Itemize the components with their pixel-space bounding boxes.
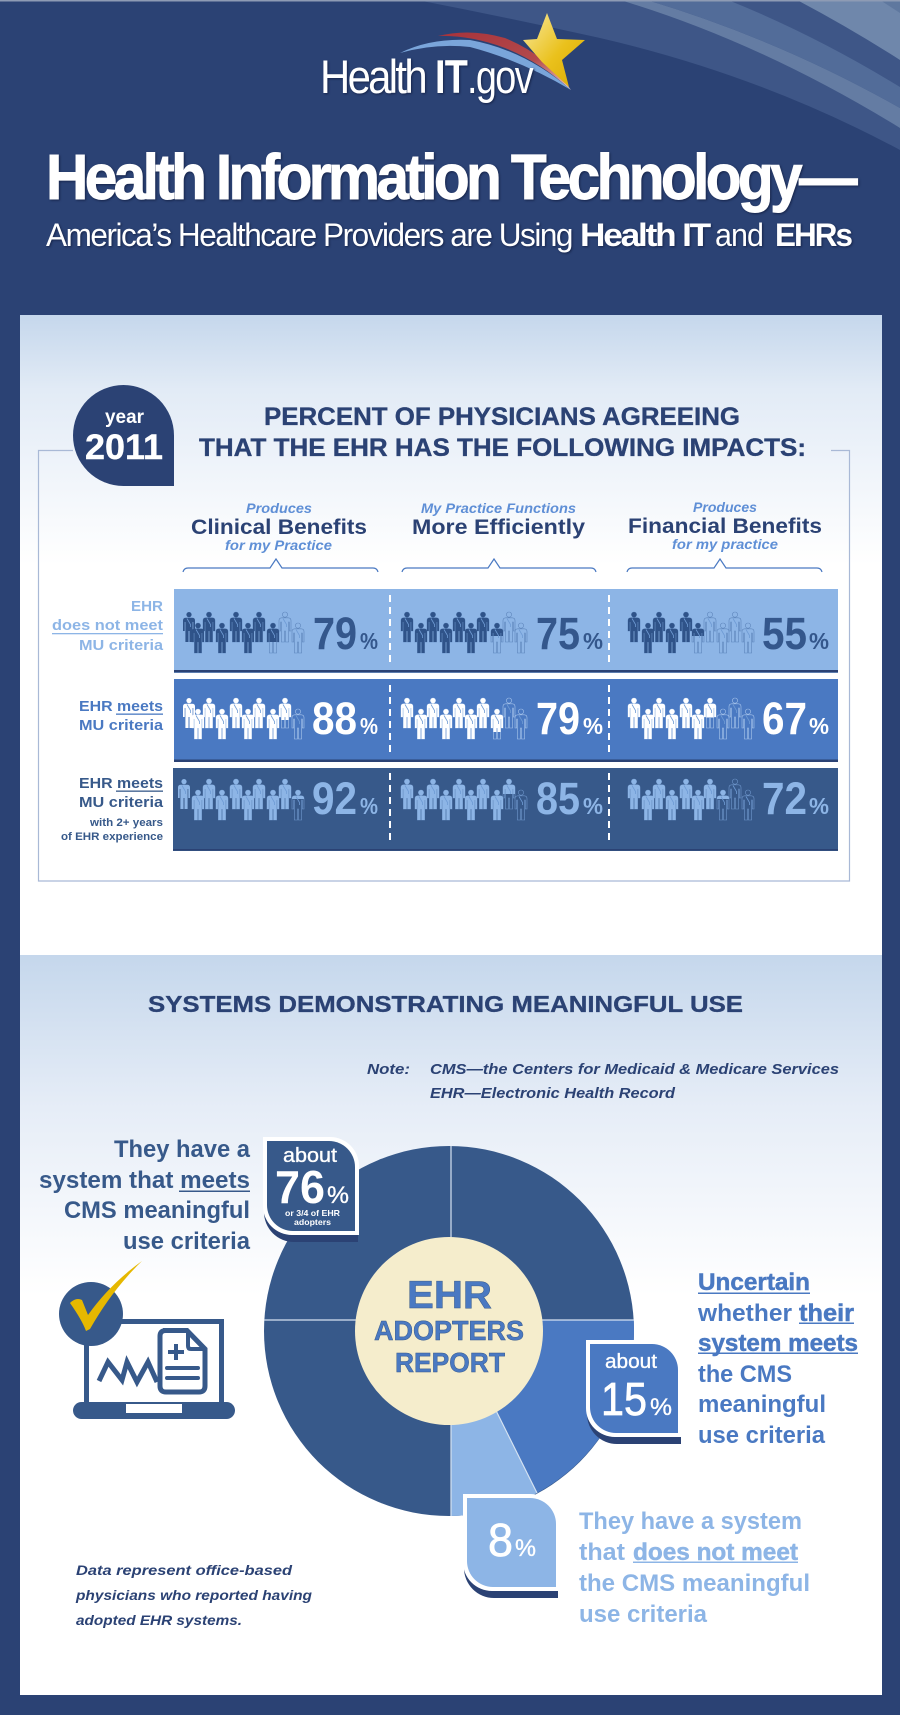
value 75%: 75 [536,608,580,659]
value 79%: 79 [313,608,357,659]
callout: 8% [463,1494,559,1598]
row label: meets: MU criteria [79,717,164,734]
center circle label [355,1237,543,1425]
people: 79 percent [183,612,304,653]
callout: about 76%: % [327,1182,349,1209]
footnote: adopted EHR systems. [76,1612,242,1628]
heading: percent of physicians: PERCENT OF PHYSICIANS AGREEING [264,403,740,431]
callout: about 76%: or 3/4 of EHR [285,1208,340,1218]
row 1: EHR does not meet MU criteria [174,589,838,673]
heading: percent of physicians [199,403,806,462]
value 79%: 79 [536,693,580,744]
value 92%: % [360,793,378,819]
icon: laptop with record and check mark [59,1261,235,1419]
heading: percent of physicians: THAT THE EHR HAS THE FOLLOWING IMPACTS: [199,434,806,462]
panel: white content background [20,315,882,1695]
row label: meets with 2+ years: with 2+ years [89,817,163,829]
people: 67 percent [628,698,754,739]
text: meets criteria [39,1136,251,1255]
text: uncertain: use criteria [698,1422,826,1449]
people: 92 percent [178,779,304,820]
value 92%: 92 [312,773,357,824]
value 79%: % [360,628,378,654]
row label: does not meet: MU criteria [79,637,164,654]
people: 55 percent [628,612,754,653]
footnote [75,1562,312,1628]
value 75%: % [583,628,603,654]
logo: HealthIT.gov [320,13,585,103]
heading: systems demonstrating meaningful use: SYSTEMS DEMONSTRATING MEANINGFUL USE [148,991,743,1017]
text: does not meet [579,1508,810,1628]
footnote: Data represent office-based [76,1562,293,1578]
logo: HealthIT.gov: Health [320,50,426,103]
value 72%: % [809,793,829,819]
text: does not meet: They have a system [579,1508,802,1535]
donut chart [264,1146,634,1516]
people: 85 percent [401,779,527,820]
value 55%: 55 [762,608,807,659]
callout: about 15%: about [605,1351,657,1373]
text: meets criteria: They have a [114,1136,251,1163]
value 67%: 67 [762,693,807,744]
value 55%: % [809,628,829,654]
note: EHR—Electronic Health Record [430,1085,676,1102]
callout: about 15%: % [650,1394,672,1421]
value 88%: 88 [312,693,357,744]
note: Note: [367,1061,410,1078]
column header: more efficiently [402,500,596,572]
column header: financial benefits: Financial Benefits [628,515,822,538]
column header: more efficiently: My Practice Functions [421,500,576,516]
callout: about 76%: adopters [294,1217,331,1227]
panel frame [38,450,850,881]
logo: HealthIT.gov: IT [435,50,468,103]
value 67%: % [809,713,829,739]
row 3: EHR meets MU criteria with 2+ years [173,768,838,851]
text: uncertain: the CMS [698,1361,792,1388]
callout: about 15%: 15 [601,1373,647,1425]
text: does not meet: that [579,1539,625,1566]
column header: more efficiently: More Efficiently [412,516,585,539]
text: meets criteria: system that meets [39,1167,250,1194]
column header: clinical benefits [183,500,378,572]
center circle label: EHR [407,1274,492,1317]
text: does not meet: the CMS meaningful [579,1570,810,1597]
people: 72 percent [628,779,754,820]
text: uncertain: whether [697,1300,792,1327]
year badge: 2011 [85,428,163,467]
center circle label: REPORT [395,1347,505,1378]
subtitle: America’s Healthcare Providers are Using [46,217,572,253]
segment: 8 percent [451,1320,537,1516]
people: 75 percent [401,612,527,653]
value 88%: % [360,713,378,739]
note: CMS—the Centers for Medicaid & Medicare Services [430,1061,839,1078]
segment: 15 percent [451,1320,634,1493]
segment: 76 percent [264,1146,634,1516]
row label: meets with 2+ years: EHR meets [79,775,163,792]
row label: meets [79,698,164,734]
text: uncertain: their [799,1300,854,1327]
year badge [73,385,174,486]
row label: does not meet: EHR [131,598,163,615]
value 85%: 85 [536,773,580,824]
text: does not meet: use criteria [579,1601,708,1628]
subtitle: and [715,217,763,253]
subtitle: Health IT [580,217,712,253]
column header: clinical benefits: Produces [246,500,312,516]
column header: financial benefits: for my practice [672,536,778,552]
note [367,1061,839,1102]
callout: 8%: % [515,1535,536,1562]
text: meets criteria: CMS meaningful [64,1197,250,1224]
center circle label: ADOPTERS [374,1315,524,1346]
callout: about 76% [263,1137,359,1242]
row label: meets: EHR meets [79,698,163,715]
text: meets criteria: use criteria [123,1228,251,1255]
value 85%: % [583,793,603,819]
subtitle: EHRs [775,217,852,253]
value 72%: 72 [762,773,807,824]
people: 88 percent [183,698,304,739]
callout: about 15% [586,1340,681,1444]
callout: 8%: 8 [488,1514,513,1566]
column header: financial benefits [627,499,822,572]
people: 79 percent [401,698,527,739]
row label: does not meet: does not meet [52,617,163,634]
row 2: EHR meets MU criteria [174,679,838,762]
text: does not meet: does not meet [633,1539,798,1566]
row label: meets with 2+ years: MU criteria [79,794,164,811]
callout: about 76%: about [283,1145,337,1167]
text: uncertain: meaningful [698,1391,826,1418]
row label: meets with 2+ years [61,775,164,843]
text: uncertain: system meets [698,1330,858,1357]
row label: does not meet [52,598,164,654]
text: uncertain [697,1269,858,1449]
callout: about 76%: 76 [275,1161,325,1213]
text: uncertain: Uncertain [698,1269,810,1296]
column header: clinical benefits: Clinical Benefits [191,516,367,539]
row label: meets with 2+ years: of EHR experience [61,831,163,843]
year badge: year [105,407,145,428]
value 79%: % [583,713,603,739]
subtitle [46,217,852,253]
footnote: physicians who reported having [75,1587,312,1603]
logo: HealthIT.gov: .gov [467,50,534,103]
column header: financial benefits: Produces [693,499,757,515]
column header: clinical benefits: for my Practice [225,537,332,553]
